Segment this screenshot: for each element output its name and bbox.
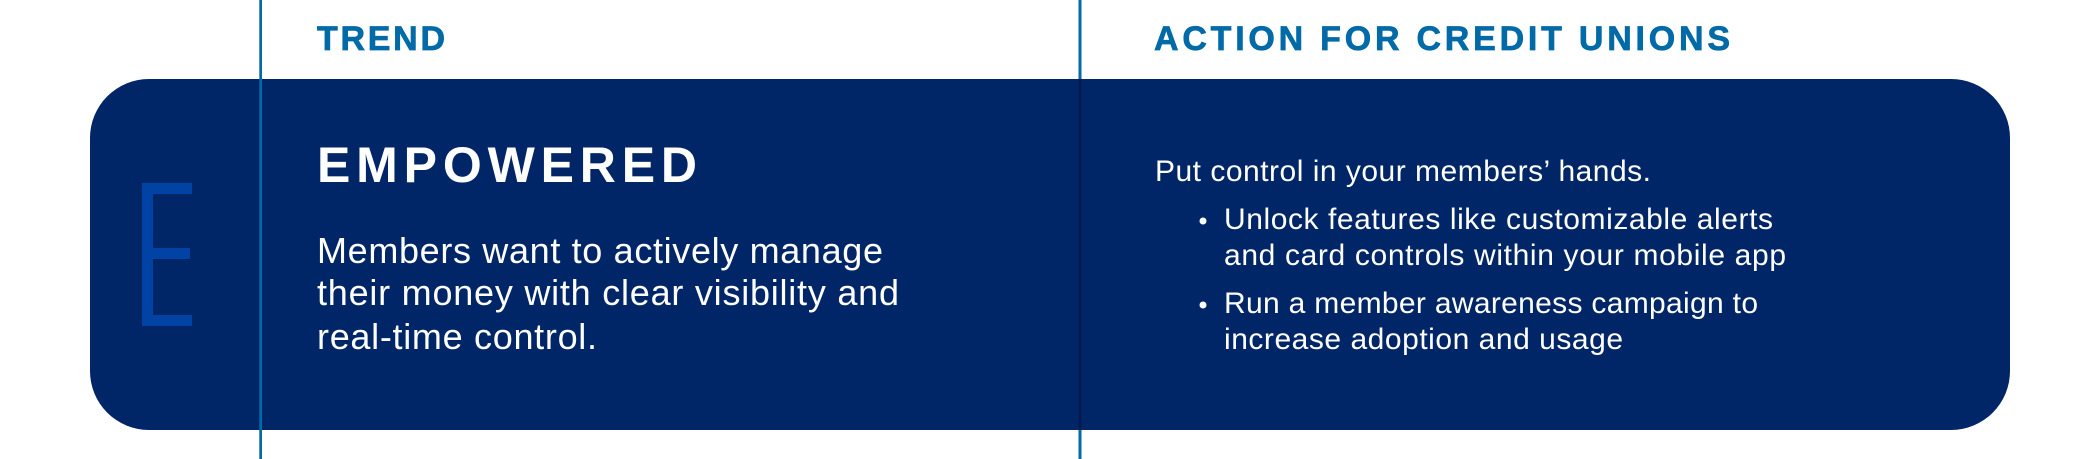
heading: trend: TREND — [317, 20, 445, 58]
panel: navy rounded background — [90, 79, 2010, 430]
bullet one — [1200, 203, 1786, 272]
bullet two: increase adoption and usage — [1224, 323, 1623, 356]
trend title: EMPOWERED — [317, 137, 697, 193]
column line: trend — [259, 0, 262, 459]
trend description: real-time control. — [317, 316, 597, 357]
column line: action — [1078, 0, 1082, 459]
icon: large letter E: E — [134, 138, 198, 371]
trend description: their money with clear visibility and — [317, 272, 899, 313]
bullet two: Run a member awareness campaign to — [1224, 287, 1758, 320]
bullet one: Unlock features like customizable alerts — [1224, 203, 1773, 236]
trend description: Members want to actively manage — [317, 230, 883, 271]
bullet two — [1200, 287, 1758, 356]
icon: large letter E — [142, 183, 192, 326]
heading: action for credit unions: ACTION FOR CREDIT UNIONS — [1154, 20, 1730, 58]
trend description — [317, 230, 899, 357]
action intro: Put control in your members’ hands. — [1155, 155, 1651, 188]
action text — [1155, 155, 1786, 356]
bullet one: and card controls within your mobile app — [1224, 239, 1786, 272]
